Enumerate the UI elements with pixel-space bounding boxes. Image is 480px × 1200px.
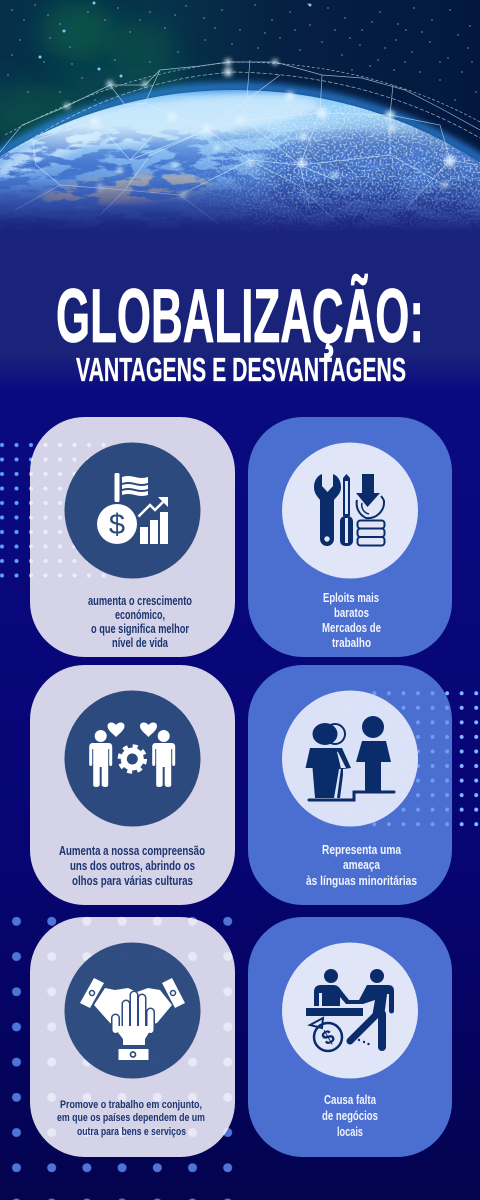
panel: threat to minority languages [248,665,452,905]
text: Aumenta a nossa compreensão [59,844,205,858]
text: Representa uma [322,843,402,857]
text: ameaça [343,858,381,872]
text: de negócios [322,1109,378,1123]
globe [0,77,480,229]
icon: customer kicking money bag away: $ [318,1026,339,1050]
text: em que os países dependem de um [57,1112,205,1124]
text: às línguas minoritárias [306,874,417,888]
network lines and nodes [0,58,480,225]
text [306,843,417,888]
text: locais [337,1125,363,1139]
text: baratos [334,606,369,620]
text: outra para bens e serviços [77,1126,186,1138]
text: uns dos outros, abrindo os [70,859,195,873]
text: Promove o trabalho em conjunto, [60,1099,202,1111]
icon: flag, dollar and chart [97,473,168,544]
text: aumenta o crescimento [88,594,192,608]
text [88,594,192,650]
text: Mercados de [322,621,381,635]
fade into background [0,178,480,232]
text [59,844,205,888]
icon: joined hands [80,978,185,1060]
icon: tools, arrow and coins [314,474,384,546]
panel: cheap labor markets [248,417,452,657]
panel: economic growth [30,417,235,657]
icon: customer kicking money bag away [306,969,394,1051]
icon: flag, dollar and chart: $ [109,509,125,541]
text: o que significa melhor [91,622,189,636]
icon: two people on uneven steps [306,716,394,800]
panel: lack of local business [248,917,452,1157]
text [322,1093,378,1139]
text: nível de vida [112,636,169,650]
hero: earth from space with network [0,0,480,229]
dots: top left [0,438,110,583]
text [322,591,381,650]
dots: middle right [338,686,480,832]
text [57,1099,205,1138]
panel: mutual understanding [30,665,235,905]
icon: two people, gear and hearts [89,722,175,787]
starry sky [0,0,480,162]
text: olhos para várias culturas [72,874,193,888]
text: trabalho [332,636,371,650]
text: Causa falta [324,1093,377,1107]
text: Eploits mais [323,591,379,605]
dots: bottom left [0,904,240,1200]
panel: working together [30,917,235,1157]
text: económico, [115,608,165,622]
